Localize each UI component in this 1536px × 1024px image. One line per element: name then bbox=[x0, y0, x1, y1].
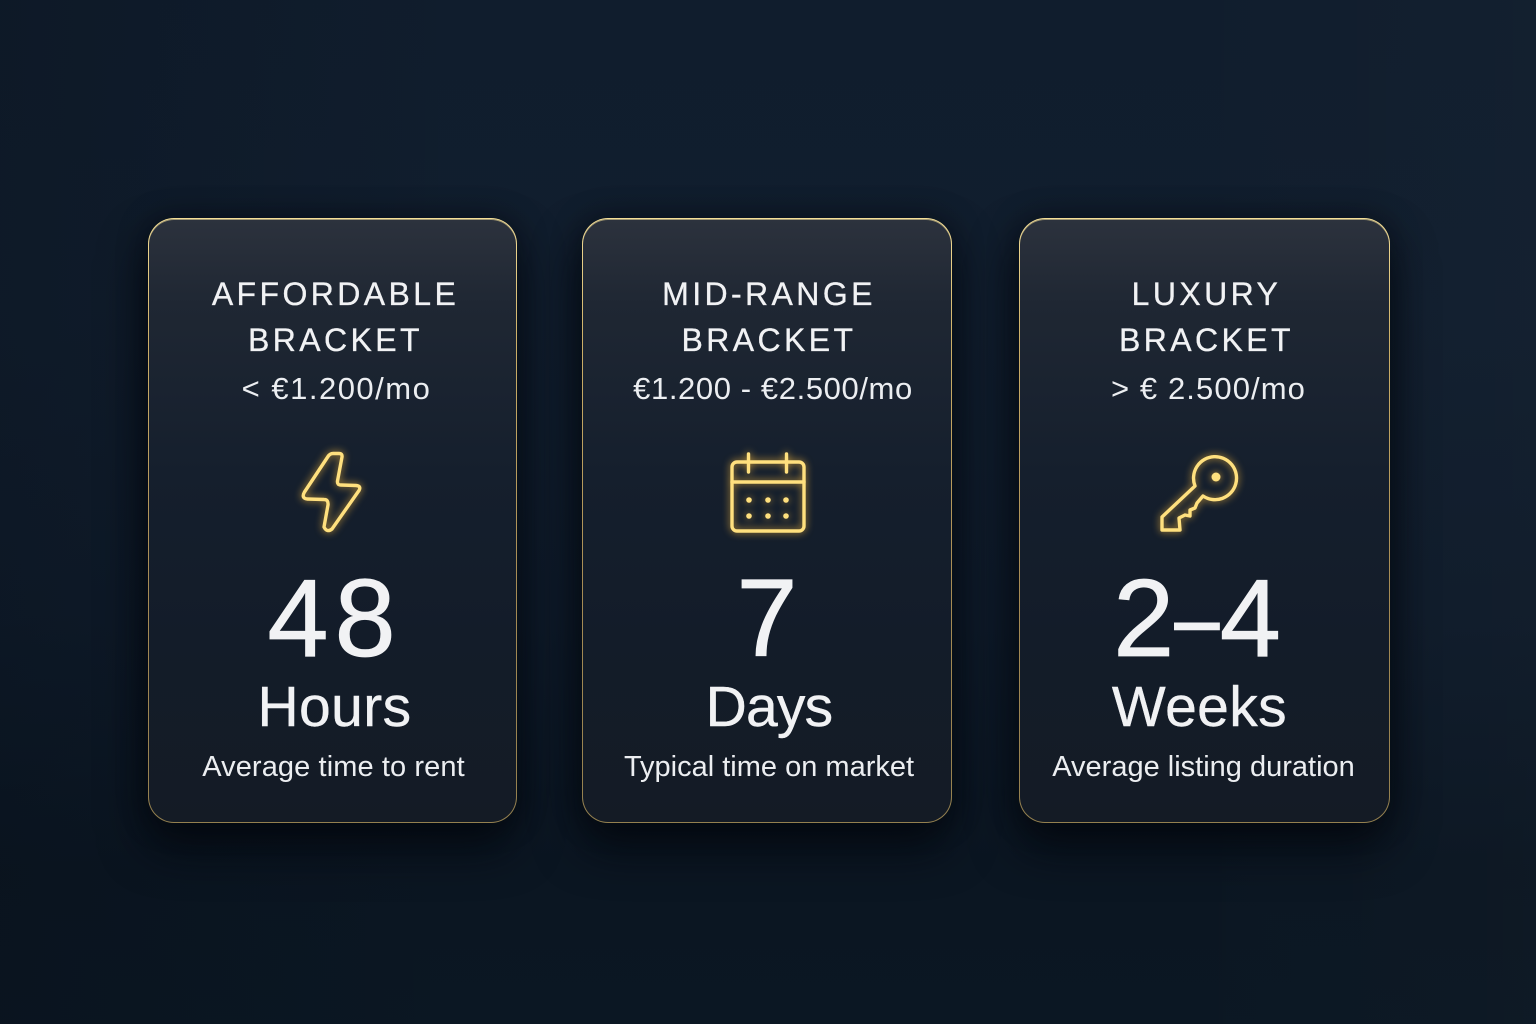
stat: 48: 48 bbox=[267, 557, 402, 680]
unit: weeks: Weeks bbox=[1112, 675, 1287, 739]
heading: affordable bracket: AFFORDABLE bbox=[212, 276, 459, 312]
panel: affordable bracket bbox=[148, 218, 517, 823]
description: time on market: Typical time on market bbox=[624, 751, 914, 783]
stat: 7: 7 bbox=[736, 557, 798, 680]
heading: luxury bracket: BRACKET bbox=[1119, 322, 1294, 358]
description: time to rent: Average time to rent bbox=[202, 751, 465, 783]
heading: affordable bracket bbox=[212, 276, 459, 358]
price range: over 2500: > € 2.500/mo bbox=[1111, 371, 1306, 406]
stat: 2-4: 2–4 bbox=[1113, 557, 1282, 680]
heading: affordable bracket: BRACKET bbox=[248, 322, 423, 358]
price range: under 1200: < €1.200/mo bbox=[242, 371, 431, 406]
unit: days: Days bbox=[706, 675, 832, 739]
price range: 1200 to 2500: €1.200 - €2.500/mo bbox=[633, 371, 913, 406]
panel: mid-range bracket bbox=[582, 218, 952, 823]
heading: mid-range bracket bbox=[662, 276, 876, 358]
description: listing duration: Average listing duration bbox=[1052, 751, 1355, 783]
icon: key bbox=[1162, 457, 1237, 530]
panel: luxury bracket bbox=[1019, 218, 1390, 823]
heading: mid-range bracket: MID-RANGE bbox=[662, 276, 876, 312]
icon: lightning bolt bbox=[303, 454, 360, 531]
icon: calendar bbox=[732, 454, 804, 531]
heading: luxury bracket bbox=[1119, 276, 1294, 358]
heading: mid-range bracket: BRACKET bbox=[682, 322, 856, 358]
heading: luxury bracket: LUXURY bbox=[1132, 276, 1281, 312]
unit: hours: Hours bbox=[257, 675, 412, 739]
